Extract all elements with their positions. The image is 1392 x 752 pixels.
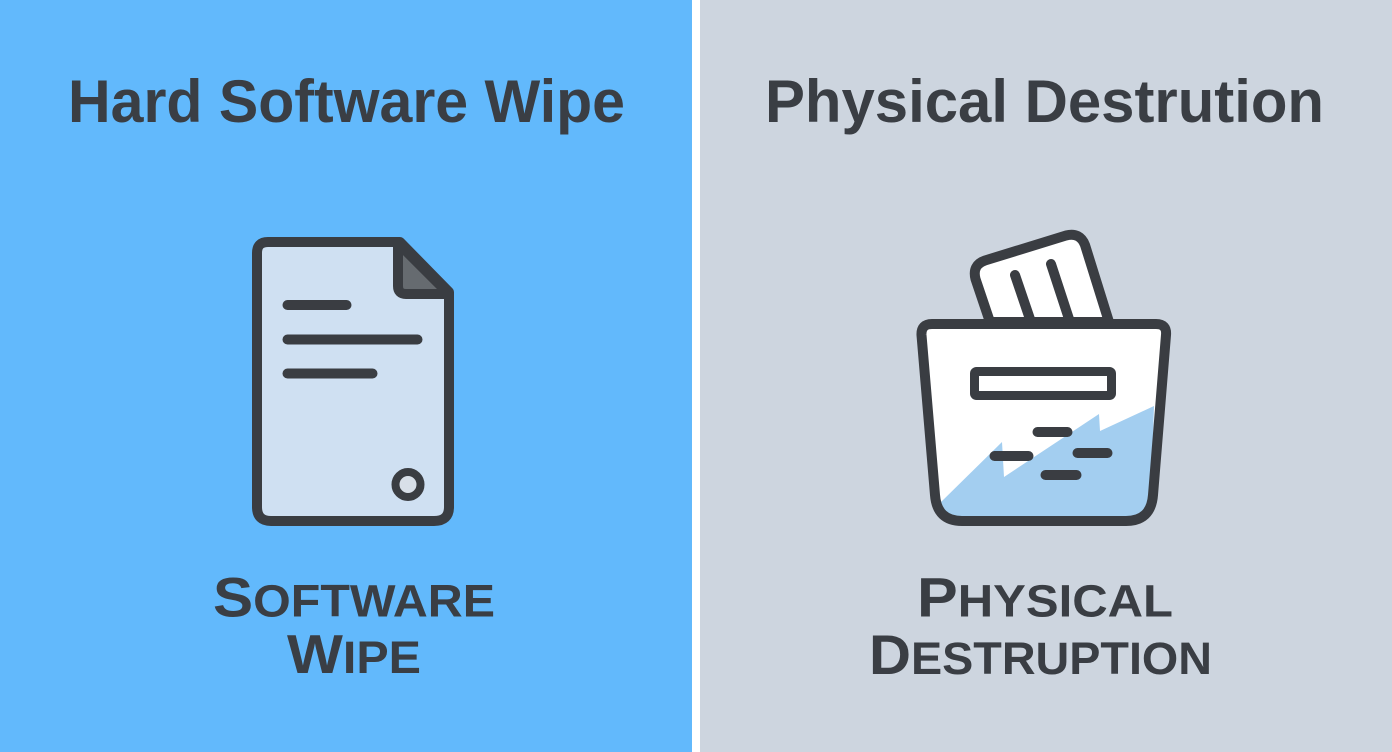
label: physical destrution: PHYSICAL xyxy=(917,566,1173,628)
heading: hard software wipe: Hard Software Wipe xyxy=(68,68,625,135)
label: software wipe: SOFTWARE xyxy=(213,566,495,628)
label: software wipe: WIPE xyxy=(287,623,421,685)
heading: physical destrution: Physical Destrution xyxy=(765,68,1324,135)
label: physical destrution: DESTRUPTION xyxy=(869,623,1212,686)
paper entering shredder xyxy=(975,235,1109,322)
shredder outline xyxy=(921,324,1166,521)
shredder slot xyxy=(974,372,1112,396)
shredded strips xyxy=(994,432,1108,475)
panel: hard software wipe xyxy=(0,0,692,752)
icon: shredder xyxy=(921,235,1166,521)
panel: physical destruction xyxy=(700,0,1392,752)
label: physical destrution xyxy=(869,566,1212,686)
label: software wipe xyxy=(213,566,495,685)
icon: document xyxy=(257,242,449,521)
shredder body xyxy=(921,324,1166,521)
shredded fill xyxy=(941,406,1154,518)
